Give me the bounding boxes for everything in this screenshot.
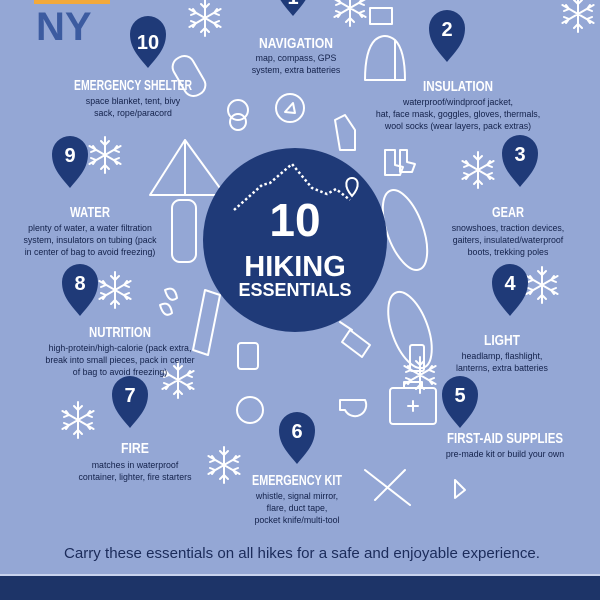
item 3 gear: gaiters, insulated/waterproof xyxy=(453,235,564,245)
item 1 navigation: NAVIGATION xyxy=(259,36,333,52)
item 5 first aid: FIRST-AID SUPPLIES xyxy=(447,431,563,447)
item 6 emergency kit: 6 xyxy=(291,421,303,443)
item 4 light: lanterns, extra batteries xyxy=(456,363,549,373)
snowflake decorations xyxy=(62,0,594,483)
item 6 emergency kit: EMERGENCY KIT xyxy=(252,473,342,489)
item 7 fire xyxy=(79,376,192,482)
item 8 nutrition xyxy=(45,264,195,377)
center circle xyxy=(203,148,387,332)
item 2 insulation: INSULATION xyxy=(423,79,493,95)
item 9 water xyxy=(24,136,157,257)
item 9 water: WATER xyxy=(70,205,110,221)
item 1 navigation xyxy=(252,0,341,75)
item 9 water: 9 xyxy=(64,145,76,167)
item 10 emergency shelter xyxy=(74,16,192,118)
item 9 water: system, insulators on tubing (pack xyxy=(24,235,157,245)
item 7 fire: FIRE xyxy=(121,441,149,457)
item 2 insulation: hat, face mask, goggles, gloves, thermals, xyxy=(376,109,540,119)
item 6 emergency kit: whistle, signal mirror, xyxy=(255,491,338,501)
item 6 emergency kit xyxy=(252,412,342,525)
center circle: HIKING xyxy=(244,251,346,283)
item 4 light: LIGHT xyxy=(484,333,520,349)
item 9 water: in center of bag to avoid freezing) xyxy=(25,247,155,257)
item 4 light: 4 xyxy=(504,273,516,295)
item 10 emergency shelter: sack, rope/paracord xyxy=(94,108,172,118)
item 4 light xyxy=(456,264,549,373)
logo: NY xyxy=(36,5,92,49)
item 7 fire: matches in waterproof xyxy=(92,460,179,470)
item 3 gear: GEAR xyxy=(492,205,524,221)
item 1 navigation: system, extra batteries xyxy=(252,65,341,75)
item 10 emergency shelter: EMERGENCY SHELTER xyxy=(74,78,192,94)
item 2 insulation xyxy=(376,10,540,131)
item 8 nutrition: break into small pieces, pack in center xyxy=(45,355,195,365)
item 10 emergency shelter: 10 xyxy=(137,32,159,54)
item 8 nutrition: of bag to avoid freezing) xyxy=(73,367,167,377)
item 5 first aid xyxy=(442,376,564,459)
item 2 insulation: waterproof/windproof jacket, xyxy=(402,97,513,107)
logo xyxy=(34,0,110,49)
item 9 water: plenty of water, a water filtration xyxy=(28,223,152,233)
item 2 insulation: 2 xyxy=(441,19,453,41)
item 5 first aid: 5 xyxy=(454,385,466,407)
item 3 gear: 3 xyxy=(514,144,526,166)
item 2 insulation: wool socks (wear layers, pack extras) xyxy=(384,121,531,131)
item 4 light: headlamp, flashlight, xyxy=(462,351,542,361)
item 8 nutrition: 8 xyxy=(74,273,86,295)
item 1 navigation: map, compass, GPS xyxy=(256,53,336,63)
item 5 first aid: pre-made kit or build your own xyxy=(446,449,564,459)
icons: gear items xyxy=(150,8,465,505)
item 3 gear: snowshoes, traction devices, xyxy=(452,223,564,233)
item 6 emergency kit: flare, duct tape, xyxy=(267,503,327,513)
item 3 gear xyxy=(452,135,564,257)
item 6 emergency kit: pocket knife/multi-tool xyxy=(254,515,340,525)
bottom band xyxy=(0,574,600,600)
item 8 nutrition: high-protein/high-calorie (pack extra, xyxy=(49,343,191,353)
center circle: ESSENTIALS xyxy=(238,280,352,300)
item 10 emergency shelter: space blanket, tent, bivy xyxy=(86,96,181,106)
center circle: 10 xyxy=(269,194,321,246)
item 8 nutrition: NUTRITION xyxy=(89,325,151,341)
item 7 fire: container, lighter, fire starters xyxy=(79,472,192,482)
item 3 gear: boots, trekking poles xyxy=(468,247,549,257)
footer tagline: Carry these essentials on all hikes for a safe and enjoyable experience. xyxy=(64,545,540,562)
item 7 fire: 7 xyxy=(124,385,136,407)
